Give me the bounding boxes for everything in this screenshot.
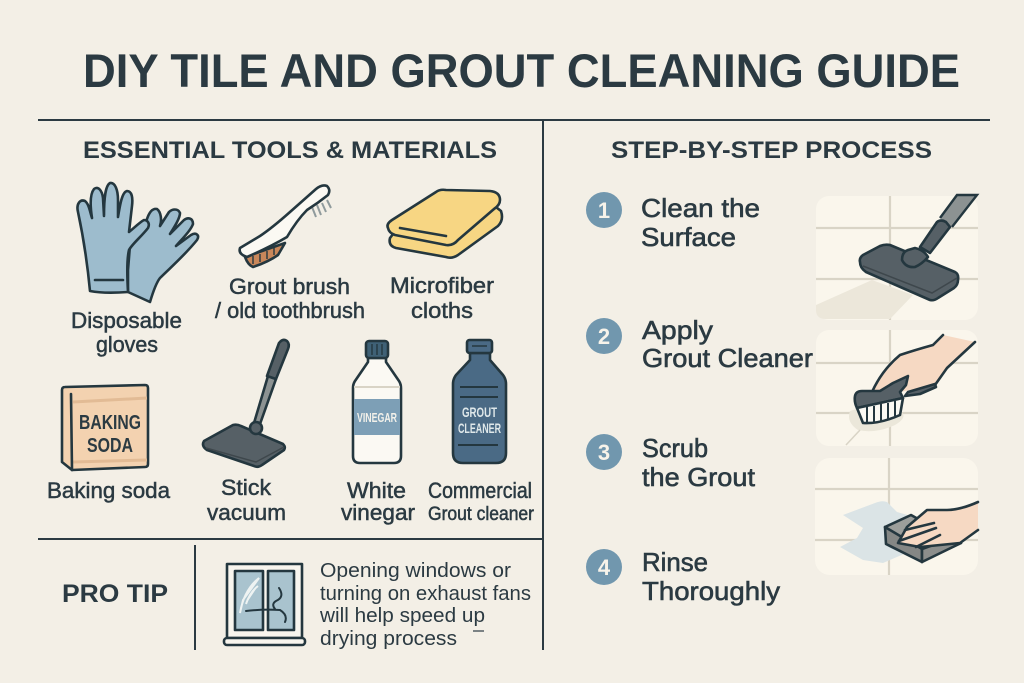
icon: baking soda box: BAKING: [79, 412, 141, 434]
step 2: 2: [598, 324, 610, 349]
icon: microfiber cloths: [388, 190, 502, 258]
heading: tools: ESSENTIAL TOOLS & MATERIALS: [83, 137, 497, 164]
heading: pro tip: PRO TIP: [62, 580, 168, 608]
label: microfiber cloths: [390, 273, 494, 323]
step 3: 3: [598, 440, 610, 465]
label: commercial grout cleaner: [428, 478, 535, 525]
icon: gloves: [77, 183, 198, 302]
icon: baking soda box: [62, 385, 148, 470]
step 1: [586, 192, 760, 252]
label: commercial grout cleaner: Grout cleaner: [428, 504, 535, 525]
step 2: Grout Cleaner: [642, 343, 813, 373]
step 4: Rinse: [642, 547, 708, 577]
label: microfiber cloths: Microfiber: [390, 273, 494, 298]
label: grout brush: Grout brush: [229, 274, 350, 299]
step 3: [586, 433, 756, 492]
illustration: scrubbing with brush: [816, 330, 978, 446]
step 4: 4: [598, 555, 611, 580]
label: stick vacuum: [207, 475, 286, 525]
icon: window: [224, 564, 305, 645]
label: white vinegar: [341, 478, 415, 525]
label: disposable gloves: [71, 308, 182, 357]
label: baking soda: Baking soda: [47, 478, 171, 503]
text: pro tip body: turning on exhaust fans: [320, 583, 531, 605]
panel: step-by-step process: [586, 137, 978, 606]
icon: grout cleaner bottle: [453, 340, 506, 463]
step 1: Clean the: [641, 193, 760, 223]
icon: grout brush: [240, 185, 331, 267]
title: DIY TILE AND GROUT CLEANING GUIDE: [83, 44, 960, 97]
label: white vinegar: vinegar: [341, 500, 415, 525]
step 2: [586, 315, 813, 373]
text: pro tip body: [319, 560, 531, 650]
step 4: Thoroughly: [642, 576, 780, 606]
label: disposable gloves: gloves: [96, 332, 158, 357]
label: stick vacuum: Stick: [221, 475, 272, 500]
text: pro tip body: Opening windows or: [320, 560, 511, 582]
step 3: Scrub: [642, 433, 708, 463]
illustration: sponge rinsing: [815, 458, 978, 575]
icon: vinegar bottle: VINEGAR: [357, 410, 397, 425]
illustration: vacuuming tile: [816, 195, 978, 320]
text: pro tip body: will help speed up: [319, 605, 485, 627]
icon: stick vacuum: [203, 340, 289, 467]
label: microfiber cloths: cloths: [411, 298, 473, 323]
icon: baking soda box: SODA: [87, 435, 133, 457]
label: white vinegar: White: [347, 478, 406, 503]
label: disposable gloves: Disposable: [71, 308, 182, 333]
step 3: the Grout: [642, 462, 756, 492]
label: commercial grout cleaner: Commercial: [428, 478, 532, 503]
step 4: [586, 547, 780, 606]
icon: grout cleaner bottle: GROUT: [462, 404, 497, 420]
step 2: Apply: [642, 315, 713, 345]
step 1: 1: [598, 198, 610, 223]
icon: vinegar bottle: [353, 341, 401, 463]
heading: steps: STEP-BY-STEP PROCESS: [611, 137, 932, 164]
label: grout brush: / old toothbrush: [215, 298, 365, 323]
panel: pro tip: [62, 560, 531, 650]
label: stick vacuum: vacuum: [207, 500, 286, 525]
label: grout brush: [215, 274, 365, 323]
text: pro tip body: drying process: [320, 628, 457, 650]
panel: essential tools and materials: [47, 137, 535, 525]
step 1: Surface: [641, 222, 736, 252]
icon: grout cleaner bottle: CLEANER: [458, 420, 501, 436]
